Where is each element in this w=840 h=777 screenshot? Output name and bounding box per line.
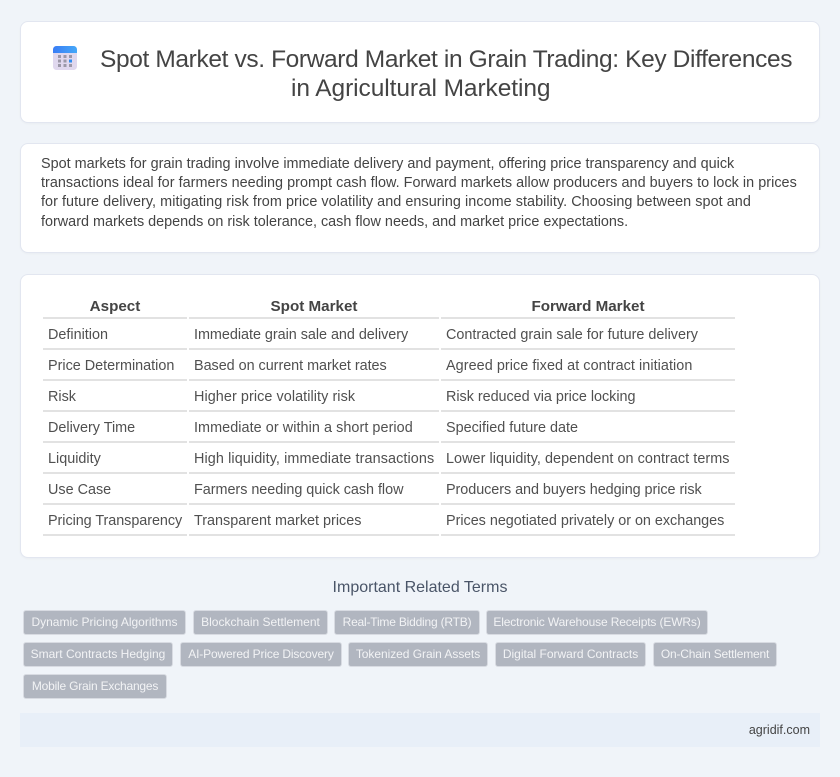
tag	[193, 610, 328, 635]
row: definition	[43, 327, 735, 350]
row: risk	[43, 389, 735, 412]
tag: Blockchain Settlement	[201, 615, 320, 629]
row: delivery time: Immediate or within a short period	[194, 420, 413, 436]
tag: Tokenized Grain Assets	[356, 647, 480, 661]
row: price determination	[43, 358, 735, 381]
row: delivery time: Specified future date	[446, 420, 578, 436]
tag	[23, 674, 167, 699]
intro paragraph	[41, 156, 797, 230]
panel: comparison table	[20, 274, 820, 558]
tag	[495, 642, 646, 667]
tag	[23, 610, 186, 635]
row: pricing transparency: Pricing Transparency	[48, 513, 182, 529]
table header: Forward Market	[531, 298, 645, 315]
tag: AI-Powered Price Discovery	[188, 647, 334, 661]
row: pricing transparency	[43, 513, 735, 536]
tag	[334, 610, 480, 635]
row: definition: Immediate grain sale and delivery	[194, 327, 408, 343]
tag	[180, 642, 342, 667]
intro paragraph: forward markets depends on risk tolerance, cash flow needs, and market price expectations.	[41, 214, 628, 230]
tag: Real-Time Bidding (RTB)	[343, 615, 471, 629]
panel: introduction	[20, 143, 820, 253]
row: use case	[43, 482, 735, 505]
row: liquidity	[43, 451, 735, 474]
row: liquidity: Lower liquidity, dependent on contract terms	[446, 451, 730, 467]
tag: Electronic Warehouse Receipts (EWRs)	[493, 615, 701, 629]
panel: related term tags	[23, 610, 777, 699]
tag	[653, 642, 777, 667]
row: price determination: Price Determination	[48, 358, 174, 374]
row: use case: Use Case	[48, 482, 111, 498]
row: risk: Risk reduced via price locking	[446, 389, 635, 405]
source text: agridif.com	[749, 723, 810, 737]
footer bar	[20, 713, 820, 747]
tag	[486, 610, 708, 635]
icon: calendar	[53, 46, 77, 70]
table header	[43, 298, 735, 319]
row: pricing transparency: Prices negotiated privately or on exchanges	[446, 513, 724, 529]
intro paragraph: for future delivery, mitigating risk from price volatility and ensuring income stability. Choosing between spot and	[41, 194, 751, 210]
title	[100, 46, 792, 102]
row: delivery time	[43, 420, 735, 443]
title: in Agricultural Marketing	[291, 75, 550, 102]
title: Spot Market vs. Forward Market in Grain Trading: Key Differences	[100, 46, 792, 73]
row: pricing transparency: Transparent market prices	[194, 513, 361, 529]
tag	[23, 642, 173, 667]
tag	[348, 642, 488, 667]
row: liquidity: Liquidity	[48, 451, 101, 467]
row: price determination: Agreed price fixed at contract initiation	[446, 358, 692, 374]
tag: On-Chain Settlement	[661, 647, 769, 661]
row: use case: Farmers needing quick cash flow	[194, 482, 403, 498]
row: delivery time: Delivery Time	[48, 420, 135, 436]
row: liquidity: High liquidity, immediate transactions	[194, 451, 434, 467]
tag: Mobile Grain Exchanges	[32, 679, 158, 693]
tag: Digital Forward Contracts	[503, 647, 638, 661]
row: risk: Risk	[48, 389, 76, 405]
heading: important related terms: Important Related Terms	[333, 579, 507, 596]
row: use case: Producers and buyers hedging price risk	[446, 482, 702, 498]
row: risk: Higher price volatility risk	[194, 389, 355, 405]
row: definition: Definition	[48, 327, 108, 343]
row: definition: Contracted grain sale for future delivery	[446, 327, 698, 343]
intro paragraph: transactions ideal for farmers needing prompt cash flow. Forward markets allow producers and buyers to lock in prices	[41, 175, 797, 191]
tag: Smart Contracts Hedging	[31, 647, 165, 661]
table header: Aspect	[90, 298, 140, 315]
intro paragraph: Spot markets for grain trading involve immediate delivery and payment, offering price transparency and quick	[41, 156, 734, 172]
row: price determination: Based on current market rates	[194, 358, 387, 374]
panel: title card	[20, 21, 820, 123]
table header: Spot Market	[271, 298, 357, 315]
tag: Dynamic Pricing Algorithms	[31, 615, 178, 629]
